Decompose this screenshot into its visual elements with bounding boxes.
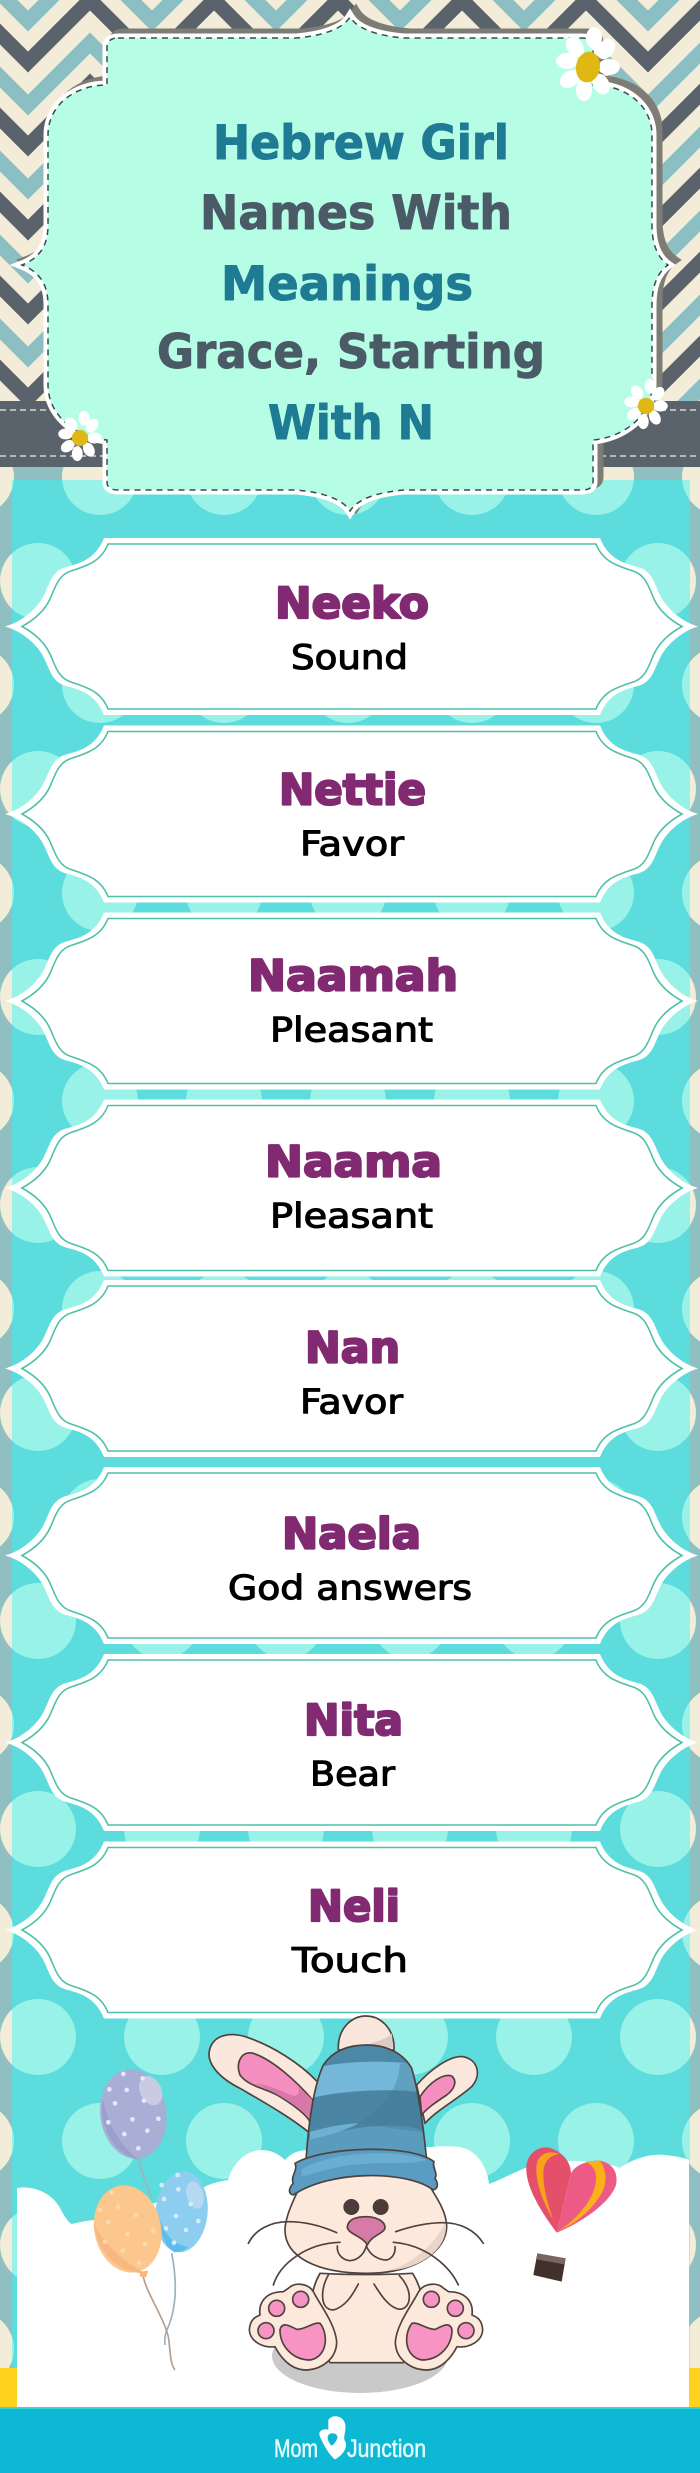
title text: Meanings — [221, 257, 473, 312]
basket — [533, 2253, 566, 2282]
logo: MomJunction: Mom — [274, 2435, 318, 2463]
footer bar — [0, 2407, 700, 2473]
orange balloon — [86, 2179, 175, 2370]
card: Nan: Favor — [300, 1382, 403, 1422]
card: Neli: Neli — [308, 1882, 400, 1932]
chevron header background — [0, 0, 700, 402]
card: Nettie: Favor — [300, 824, 404, 864]
card: Nita: Bear — [310, 1755, 395, 1794]
heart hot air balloon — [526, 2147, 617, 2282]
icon: daisy bottom right — [624, 379, 668, 429]
card: Naamah: Naamah — [248, 952, 458, 1002]
bunny character — [209, 2016, 483, 2393]
balloons — [86, 2065, 211, 2370]
pompom — [338, 2016, 394, 2050]
card: Naamah: Pleasant — [270, 1011, 433, 1050]
left ear — [209, 2035, 317, 2133]
title text: Grace, Starting — [157, 325, 545, 380]
card: Neli: Touch — [291, 1941, 408, 1980]
card: Nan — [5, 1280, 698, 1457]
icon: daisy top right — [556, 27, 620, 101]
card: Naela: God answers — [228, 1568, 472, 1608]
card: Neli — [5, 1842, 698, 2018]
yellow corner blocks — [0, 2368, 700, 2407]
card: Naamah — [5, 912, 698, 1090]
left foot — [249, 2284, 337, 2370]
body — [311, 2273, 423, 2363]
card: Nita — [5, 1654, 698, 1831]
logo icon — [319, 2416, 346, 2459]
bunny shadow — [272, 2319, 448, 2393]
card: Naela — [5, 1467, 698, 1644]
card: Neeko — [5, 538, 698, 715]
title text: Names With — [200, 186, 512, 241]
purple balloon — [94, 2065, 172, 2198]
white cloud ground — [17, 2146, 689, 2407]
eyes — [343, 2199, 389, 2215]
card: Neeko: Neeko — [275, 579, 429, 629]
card: Nan: Nan — [305, 1324, 400, 1374]
right foot — [395, 2284, 483, 2370]
whiskers and mouth — [248, 2222, 483, 2285]
side strip background with cream dots — [0, 467, 700, 2407]
title text: With N — [268, 396, 434, 451]
nose — [347, 2217, 385, 2245]
card: Naama: Pleasant — [270, 1197, 433, 1236]
card: Naama — [5, 1100, 698, 1276]
dark stitched band — [0, 401, 700, 467]
title frame — [22, 12, 674, 511]
card: Nettie — [5, 726, 698, 902]
card: Naela: Naela — [282, 1510, 421, 1560]
logo: MomJunction — [274, 2416, 426, 2463]
card: Naama: Naama — [265, 1138, 442, 1188]
title text — [157, 116, 545, 451]
title text: Hebrew Girl — [213, 116, 509, 171]
head — [285, 2175, 447, 2273]
turquoise polka dot panel — [12, 480, 690, 2407]
right ear — [417, 2057, 477, 2123]
blue balloon — [152, 2169, 211, 2345]
hat — [289, 2040, 437, 2195]
card: Nettie: Nettie — [279, 766, 426, 816]
icon: daisy bottom left — [58, 411, 102, 461]
heart envelope — [526, 2147, 617, 2233]
logo: MomJunction: Junction — [347, 2435, 426, 2463]
card: Neeko: Sound — [291, 638, 408, 677]
card: Nita: Nita — [304, 1696, 403, 1746]
